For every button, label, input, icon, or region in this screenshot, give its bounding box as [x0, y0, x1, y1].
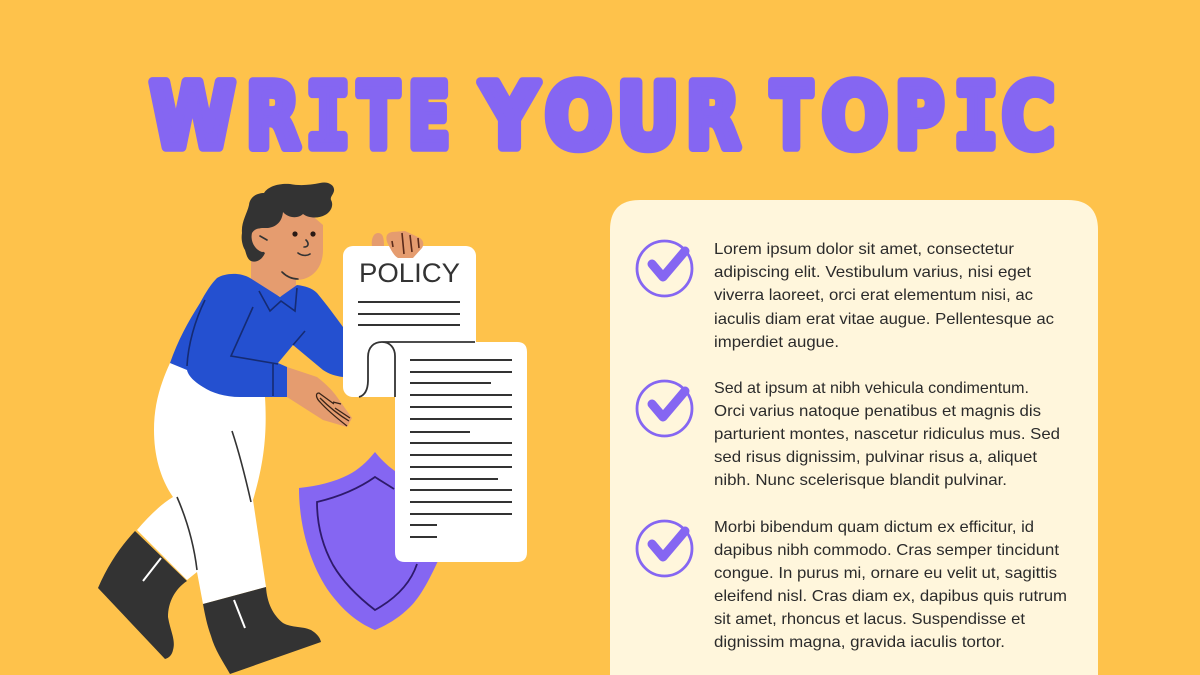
- document: long sheet: [359, 342, 527, 562]
- right boot: [203, 587, 321, 674]
- text block 3: [714, 519, 1067, 651]
- title: R: [246, 64, 300, 168]
- text block 3: eleifend nisl. Cras diam ex, dapibus quis rutrum: [714, 588, 1067, 605]
- text block 2: nibh. Nunc scelerisque blandit pulvinar.: [714, 472, 1007, 489]
- title: O: [822, 64, 888, 168]
- text block 1: viverra laoreet, orci erat elementum nisi, ac: [714, 287, 1033, 304]
- text block 1: Lorem ipsum dolor sit amet, consectetur: [714, 241, 1015, 258]
- text block 3: sit amet, rhoncus et lacus. Suspendisse et: [714, 611, 1026, 628]
- boot highlights: [143, 558, 245, 628]
- text block 1: imperdiet augue.: [714, 334, 839, 351]
- title: I: [954, 64, 998, 168]
- policy sheet lines: [358, 302, 460, 325]
- text block 2: Orci varius natoque penatibus et magnis dis: [714, 403, 1041, 420]
- title: E: [408, 64, 450, 168]
- long sheet lines: [410, 360, 512, 537]
- title: T: [358, 64, 399, 168]
- text block 3: Morbi bibendum quam dictum ex efficitur, id: [714, 519, 1034, 536]
- title: C: [1002, 64, 1055, 168]
- text block 3: dapibus nibh commodo. Cras semper tincidunt: [714, 542, 1060, 559]
- trouser fold lines: [177, 431, 251, 570]
- title: R: [686, 64, 740, 168]
- text block 3: congue. In purus mi, ornare eu velit ut, sagittis: [714, 565, 1057, 582]
- shirt lines: [187, 288, 305, 396]
- left boot: [98, 531, 187, 659]
- back leg and trousers: [137, 363, 266, 604]
- illustration: person: [98, 182, 343, 674]
- title: U: [617, 64, 679, 168]
- heading: policy: POLICY: [359, 258, 460, 288]
- icon: check 1: [637, 241, 692, 296]
- illustration: hand holding paper: [372, 231, 423, 258]
- text block 2: parturient montes, nascetur ridiculus mus. Sed: [714, 426, 1060, 443]
- document: policy sheet: [343, 246, 476, 397]
- title: W: [150, 64, 235, 168]
- ear: [252, 228, 271, 252]
- scroll curl: [359, 342, 475, 397]
- text block 1: iaculis diam erat vitae augue. Pellentesque ac: [714, 311, 1054, 328]
- icon: check 2: [637, 381, 692, 436]
- text block 1: [714, 241, 1054, 351]
- text block 1: adipiscing elit. Vestibulum varius, nisi eget: [714, 264, 1032, 281]
- title: P: [895, 64, 944, 168]
- text block 2: Sed at ipsum at nibh vehicula condimentum.: [714, 380, 1029, 397]
- text block 2: [714, 380, 1060, 489]
- title: O: [545, 64, 612, 168]
- face details: [260, 231, 316, 279]
- title: [150, 64, 1055, 168]
- icon: check 3: [637, 521, 692, 576]
- title: I: [306, 64, 350, 168]
- text block 3: dignissim magna, gravida iaculis tortor.: [714, 634, 1005, 651]
- shirt: [170, 274, 343, 397]
- text block 2: sed risus dignissim, pulvinar risus a, aliquet: [714, 449, 1038, 466]
- illustration: shield: [299, 452, 451, 630]
- neck and face: [251, 205, 323, 297]
- illustration: lower hand: [287, 367, 352, 427]
- title: Y: [480, 64, 539, 168]
- title: T: [771, 64, 812, 168]
- panel: text card: [610, 200, 1098, 675]
- hair: [242, 182, 334, 262]
